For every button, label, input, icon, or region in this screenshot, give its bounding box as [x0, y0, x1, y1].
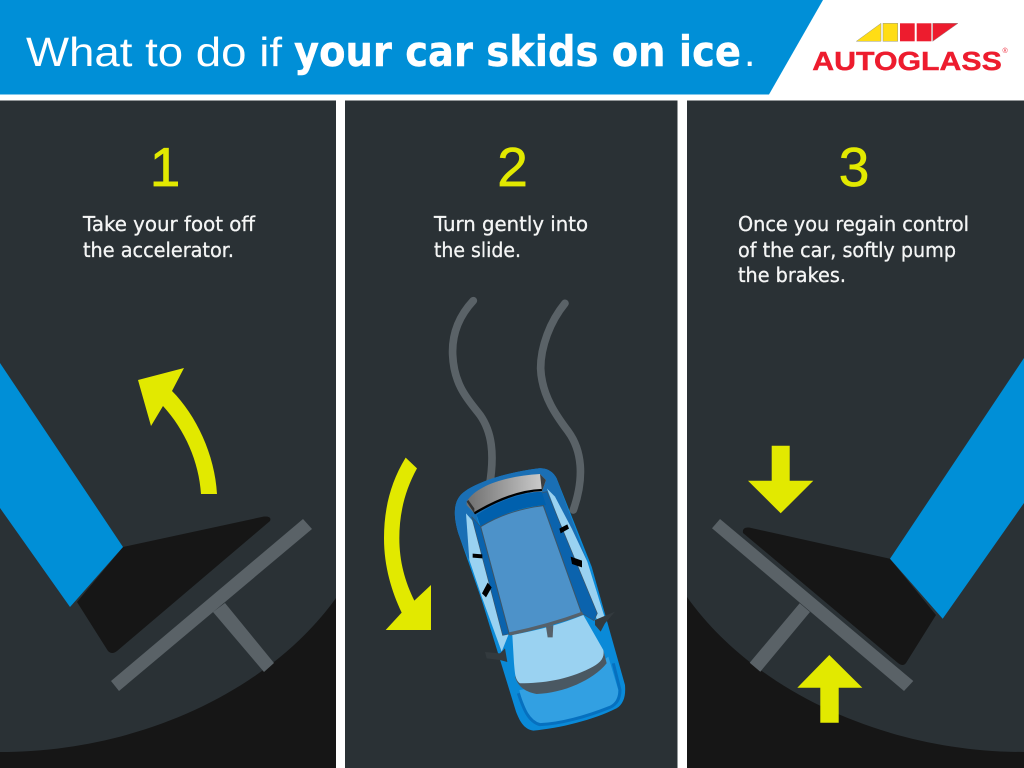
logo: Autoglass — [812, 23, 1008, 76]
brake pedal — [712, 519, 913, 691]
rear deck — [477, 492, 546, 527]
header banner — [0, 0, 823, 94]
pedal — [111, 519, 312, 691]
title: What to do if — [26, 29, 283, 75]
step 2 text: Turn gently into — [433, 212, 588, 236]
body — [455, 468, 625, 731]
hood — [519, 657, 618, 724]
logo: Autoglass: ® — [1002, 47, 1008, 55]
title: . — [744, 29, 755, 75]
step 3 text: Once you regain control — [738, 212, 969, 236]
step 2 text — [433, 212, 588, 262]
rear window — [467, 474, 546, 513]
shoe — [743, 527, 936, 665]
step 3 text — [738, 215, 968, 282]
leg — [0, 363, 123, 607]
panel 3: pump the brakes — [687, 100, 1024, 768]
door strips — [472, 517, 509, 635]
leg — [890, 358, 1024, 619]
rear body panels — [455, 468, 587, 565]
panel 1: take foot off accelerator — [0, 100, 336, 768]
step 2 text: the slide. — [434, 238, 521, 262]
step 1 text — [82, 215, 256, 258]
floor — [0, 598, 336, 768]
step 3 text: the brakes. — [738, 263, 846, 287]
floor — [687, 597, 1024, 768]
step number 2: 2 — [497, 136, 528, 198]
skid tracks — [453, 301, 580, 510]
arrow: up — [797, 655, 862, 723]
arrow: lift foot up — [138, 368, 217, 494]
windscreen — [512, 615, 604, 683]
dark band under windscreen — [515, 650, 607, 694]
arrow: steering direction — [384, 458, 431, 630]
step 1 text: Take your foot off — [82, 212, 256, 236]
step 3 text: of the car, softly pump — [738, 238, 956, 262]
screen edge — [509, 613, 583, 634]
logo: Autoglass: AUTOGLASS — [812, 48, 1002, 76]
car — [455, 468, 625, 731]
mirrors and pillars — [485, 612, 615, 662]
roof — [481, 506, 582, 634]
step number 3: 3 — [839, 136, 869, 198]
step number 1: 1 — [150, 136, 180, 198]
arrow: down — [748, 446, 813, 513]
title: your car skids on ice — [294, 27, 741, 76]
side windows — [466, 513, 508, 652]
step 1 text: the accelerator. — [83, 238, 234, 262]
shoe — [77, 516, 270, 653]
panel 2: turn into slide — [345, 100, 678, 768]
